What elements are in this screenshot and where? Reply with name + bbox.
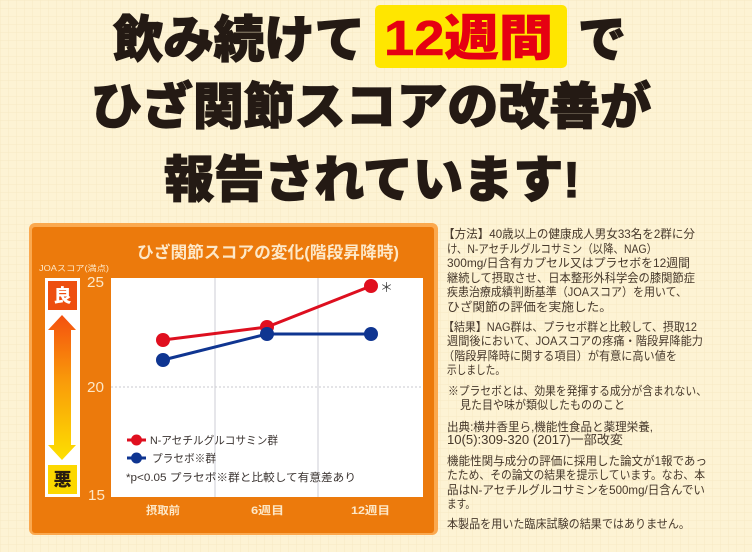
legend: red series: N-アセチルグルコサミン群 <box>150 433 278 447</box>
text block: disclaimer: 本製品を用いた臨床試験の結果ではありません。 <box>447 517 690 531</box>
legend <box>126 433 356 484</box>
text block: result: 【結果】NAG群は、プラセボ群と比較して、摂取12 <box>443 320 697 334</box>
legend: blue series: プラセボ※群 <box>152 451 216 465</box>
line chart <box>111 278 423 497</box>
title line 2: ひざ関節スコアの改善が <box>91 79 651 135</box>
legend: blue series <box>127 451 216 465</box>
text block: functional ingredient note <box>447 454 707 511</box>
highlight badge: 12 weeks <box>375 5 567 68</box>
legend note: *p<0.05 プラセボ※群と比較して有意差あり <box>126 470 356 484</box>
bad label: 悪 <box>54 470 72 490</box>
y axis labels: 25 <box>87 275 104 291</box>
x axis labels <box>146 503 390 517</box>
text block: functional ingredient note: 機能性関与成分の評価に採用した論文が1報であっ <box>447 454 707 468</box>
series: N-acetylglucosamine <box>156 279 378 347</box>
y axis labels: 15 <box>88 488 105 504</box>
text block: functional ingredient note: たため、その論文の結果を提示しています。なお、本 <box>447 468 705 482</box>
significance mark: ＊ <box>380 280 393 295</box>
text block: source <box>447 420 653 447</box>
title <box>91 5 651 208</box>
text block: result: （階段昇降時に関する項目）が有意に高い値を <box>443 349 677 363</box>
text block: result: 示しました。 <box>447 363 505 377</box>
x axis labels: 摂取前 <box>146 503 180 517</box>
chart heading: ひざ関節スコアの変化(階段昇降時) <box>137 242 399 262</box>
text block: method: 300mg/日含有カプセル又はプラセボを12週間 <box>447 256 690 270</box>
text block: method: ひざ関節の評価を実施した。 <box>447 300 612 314</box>
icon: double arrow <box>48 315 76 460</box>
text block: method: け、N-アセチルグルコサミン（以降、NAG） <box>447 242 657 256</box>
text block: method: 継続して摂取させ、日本整形外科学会の膝関節症 <box>447 271 695 285</box>
title line 1 trailing text: で <box>578 12 626 68</box>
title line 1 lead text: 飲み続けて <box>113 12 365 68</box>
text block: source: 10(5):309-320 (2017)一部改変 <box>447 432 623 447</box>
text block: functional ingredient note: 品はN-アセチルグルコサミンを500mg/日含んでい <box>447 483 705 497</box>
text block: method <box>443 227 695 314</box>
text block: result: 週間後において、JOAスコアの疼痛・階段昇降能力 <box>447 334 703 348</box>
x axis labels: 12週目 <box>351 503 390 517</box>
text block: placebo note: 見た目や味が類似したもののこと <box>460 398 625 412</box>
text block: placebo note <box>448 384 707 412</box>
text block: source: 出典:横井香里ら,機能性食品と薬理栄養, <box>447 420 653 434</box>
text block: functional ingredient note: ます。 <box>447 497 475 511</box>
y axis labels <box>87 275 105 504</box>
good label <box>48 281 77 310</box>
y axis labels: 20 <box>87 380 104 396</box>
highlight badge: 12 weeks: 12週間 <box>384 12 553 66</box>
good label: 良 <box>54 285 72 306</box>
text block: method: 【方法】40歳以上の健康成人男女33名を2群に分 <box>443 227 695 241</box>
text block: placebo note: ※プラセボとは、効果を発揮する成分が含まれない、 <box>448 384 707 398</box>
text block: result <box>443 320 703 377</box>
title line 3: 報告されています! <box>164 152 580 208</box>
good-bad gauge <box>45 278 80 497</box>
bad label <box>48 465 77 494</box>
x axis labels: 6週目 <box>251 503 284 517</box>
panel: chart <box>29 223 438 535</box>
series: placebo <box>156 327 378 367</box>
text block: method: 疾患治療成績判断基準（JOAスコア）を用いて、 <box>447 285 687 299</box>
axis unit label: JOAスコア(満点) <box>39 264 109 273</box>
